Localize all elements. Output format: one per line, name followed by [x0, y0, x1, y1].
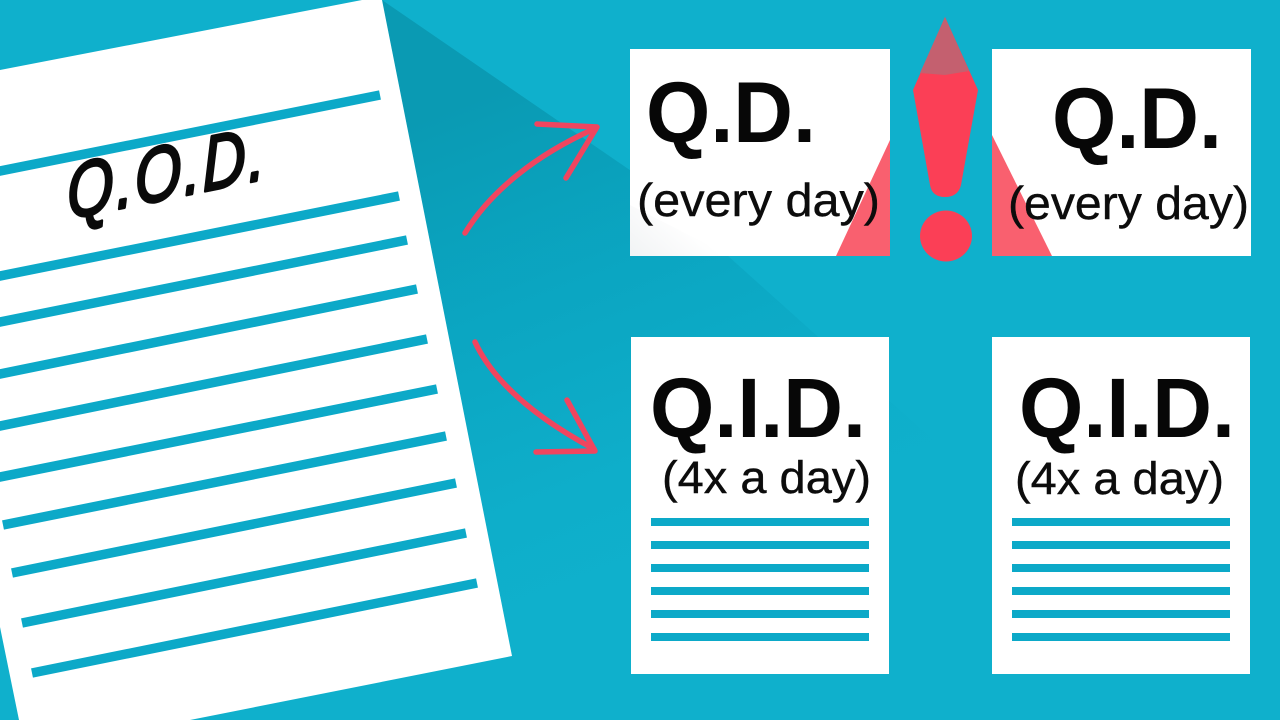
card: Q.I.D. right: Q.I.D.	[1019, 361, 1235, 455]
card lines	[651, 518, 869, 641]
card: Q.I.D. left: (4x a day)	[662, 452, 871, 503]
handwritten Q.O.D.: Q.O.D.	[66, 108, 268, 236]
arrow: down to Q.I.D.	[475, 342, 595, 452]
card: Q.D. left: (every day)	[637, 174, 880, 226]
card: Q.I.D. left	[631, 337, 889, 674]
card: Q.I.D. right: (4x a day)	[1015, 453, 1224, 504]
card: Q.D. right: (every day)	[1008, 177, 1249, 229]
card: Q.I.D. left: Q.I.D.	[650, 361, 866, 455]
card lines	[1012, 518, 1230, 641]
icon: exclamation mark	[913, 17, 978, 262]
arrow: up to Q.D.	[465, 124, 597, 233]
card: Q.D. left	[630, 49, 890, 256]
paper lines	[0, 95, 477, 673]
card: Q.I.D. right	[992, 337, 1250, 674]
card: Q.D. right	[992, 49, 1251, 256]
panel: prescription paper	[0, 0, 512, 720]
card: Q.D. right: Q.D.	[1052, 71, 1222, 167]
card: Q.D. left: Q.D.	[646, 65, 816, 161]
